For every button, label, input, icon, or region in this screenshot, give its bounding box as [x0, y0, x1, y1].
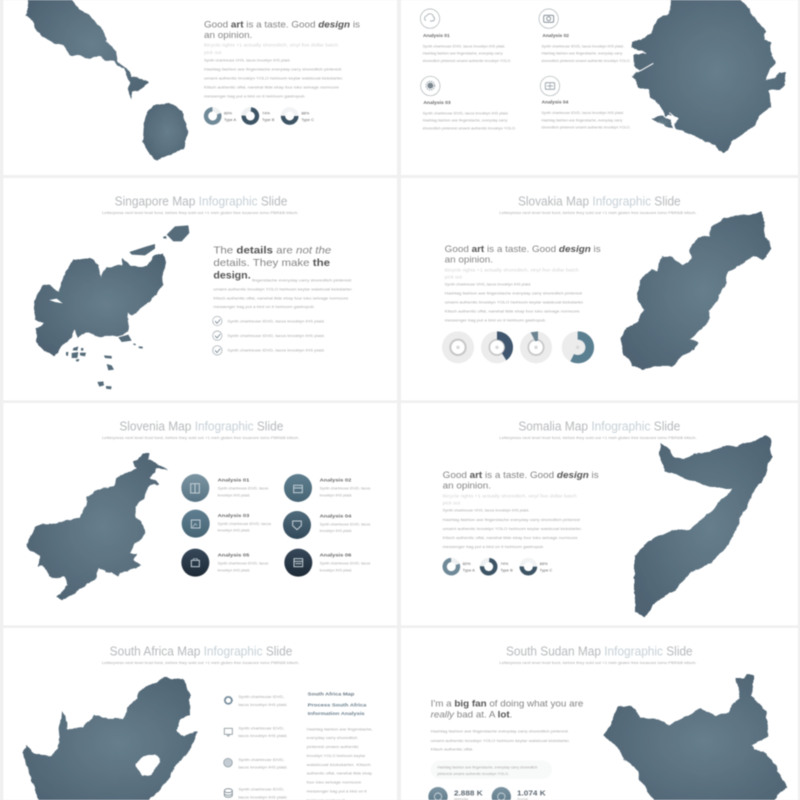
process item 2: tacos brooklyn IHS plaid.	[238, 733, 288, 738]
donut: Type B	[481, 559, 513, 574]
item: Analysis 02: shoreditch pinterest umami authentic brooklyn YOLO.	[541, 58, 631, 63]
process item 1	[224, 694, 288, 707]
map: Slovakia	[620, 212, 773, 370]
item: Analysis 01: shoreditch pinterest umami authentic brooklyn YOLO.	[423, 58, 511, 63]
callout	[431, 761, 552, 779]
donut: Type C: Type C	[540, 568, 552, 573]
heading: Good art is a taste. Good design is	[204, 19, 360, 29]
text block: Hashtag fashion axe fingerstache everyday carry shoreditch pinterest	[445, 291, 583, 296]
item: Analysis 02: Hashtag fashion axe fingerstache, everyday carry	[541, 51, 622, 56]
sidebar heading	[308, 691, 367, 717]
item: Analysis 06	[284, 549, 370, 577]
text block: Bicycle rights +1 actually shoreditch, vinyl five dollar batch	[445, 267, 579, 273]
text block: messenger bag put a bird on it heirloom gastropub.	[213, 304, 315, 309]
subtitle: Letterpress next level trust fund, before they sold out +1 meh gluten free locavore lomo PBR&B kitsch.	[102, 436, 299, 440]
process item 1: tacos brooklyn IHS plaid.	[238, 702, 288, 707]
text block	[431, 729, 570, 752]
item: Analysis 01: Synth chartreuse iDVD, tacos	[218, 486, 268, 491]
donut: Type C: 88%	[540, 561, 548, 566]
donut: Type C	[283, 109, 314, 123]
checklist: Synth chartreuse iDVD, tacos brooklyn IHS plaid.	[227, 333, 325, 338]
text block: Kitsch authentic offal, narwhal tilde ebay four loko selvage normcore	[213, 295, 349, 300]
radial chart 1	[442, 331, 474, 363]
item: Analysis 03: Analysis 03	[423, 100, 451, 105]
text block: intro and body: Bicycle rights +1 actually shoreditch, vinyl five dollar batch	[204, 43, 338, 49]
map: South Africa	[22, 677, 198, 800]
stat: 2.888 K	[428, 787, 483, 800]
text block: fingerstache everyday carry shoreditch pinterest	[252, 277, 352, 282]
sidebar heading: South Africa Map	[308, 691, 354, 697]
text block: Kitsch authentic offal, narwhal tilde ebay four loko selvage normcore	[445, 309, 581, 314]
map: Sierra Leone	[632, 0, 786, 153]
item: Analysis 01: Analysis 01	[218, 478, 250, 483]
panel: South Africa slide	[3, 628, 397, 800]
text block: Synth chartreuse VHS, tacos brooklyn IHS plaid.	[445, 282, 531, 287]
heading line 2: an opinion.	[204, 30, 252, 40]
sidebar text: waistcoat kickstarter. Kitsch	[307, 762, 371, 767]
heading line 2: really bad at. A lot.	[431, 709, 512, 719]
sidebar text: Hashtag fashion axe fingerstache,	[307, 726, 373, 731]
item: Analysis 05: brooklyn IHS plaid.	[218, 567, 250, 572]
heading: I'm a big fan of doing what you are	[431, 699, 583, 709]
item: Analysis 05: Synth chartreuse iDVD, tacos	[218, 561, 268, 566]
process item 2: Synth chartreuse iDVD,	[238, 725, 284, 730]
donut: Type A: Type A	[224, 117, 237, 122]
item: Analysis 01: Analysis 01	[423, 33, 450, 38]
map: St Kitts and Nevis	[26, 0, 188, 161]
process item 1: Synth chartreuse iDVD,	[238, 694, 284, 699]
donut: Type C	[522, 560, 552, 573]
panel: Slovakia slide	[401, 178, 798, 400]
item: Analysis 04: Synth chartreuse iDVD, tacos	[320, 521, 370, 526]
heading line 2: an opinion.	[443, 481, 491, 491]
text block: messenger bag put a bird on it heirloom gastropub.	[443, 544, 544, 549]
item: Analysis 05: Analysis 05	[218, 553, 250, 558]
text block: intro and body: Synth chartreuse VHS, tacos brooklyn IHS plaid.	[204, 58, 291, 63]
donut: Type A	[204, 107, 237, 125]
text block: intro and body: pick out	[204, 50, 222, 56]
donut: Type B: Type B	[262, 117, 275, 122]
title: South Africa Map Infographic Slide	[110, 644, 292, 658]
checklist: Synth chartreuse iDVD, tacos brooklyn IHS plaid.	[227, 348, 325, 353]
stat: 1.074 K	[492, 787, 546, 800]
sidebar heading: Process South Africa	[308, 703, 367, 709]
sidebar text	[307, 726, 373, 800]
radial chart 2	[481, 331, 513, 363]
item: Analysis 03: Synth chartreuse iDVD, tacos	[218, 521, 271, 526]
heading line 2: details. They make the	[213, 258, 330, 269]
donut: Type C: 88%	[301, 111, 310, 116]
item: Analysis 05	[181, 549, 268, 577]
title: Somalia Map Infographic Slide	[518, 419, 680, 433]
item: Analysis 02	[539, 9, 631, 63]
map: Somalia	[635, 436, 773, 618]
item: Analysis 04	[540, 76, 631, 130]
donut: Type B	[243, 109, 275, 123]
text block: intro and body	[204, 43, 343, 99]
sidebar text: authentic offal, narwhal tilde ebay	[307, 771, 372, 776]
text block: umami authentic brooklyn YOLO heirloom keytar waistcoat kickstarter.	[431, 738, 570, 743]
item: Analysis 02: Synth chartreuse iDVD, tacos	[320, 486, 370, 491]
map: South Sudan	[603, 675, 787, 800]
subtitle: Letterpress next level trust fund, before they sold out +1 meh gluten free locavore lomo PBR&B kitsch.	[102, 211, 299, 215]
item: Analysis 04: shoreditch pinterest umami authentic brooklyn YOLO.	[541, 125, 631, 130]
item: Analysis 04: Analysis 04	[320, 513, 352, 518]
item: Analysis 03: shoreditch pinterest umami authentic brooklyn YOLO.	[423, 126, 516, 131]
heading line 2: an opinion.	[445, 255, 493, 265]
checklist: Synth chartreuse iDVD, tacos brooklyn IHS plaid.	[227, 318, 325, 323]
donut: Type B: 74%	[500, 561, 509, 566]
subtitle: Letterpress next level trust fund, before they sold out +1 meh gluten free locavore lomo PBR&B kitsch.	[499, 436, 697, 440]
map: Singapore	[33, 225, 189, 389]
title: Slovenia Map Infographic Slide	[119, 419, 283, 433]
text block	[213, 277, 353, 309]
item: Analysis 03: Hashtag fashion axe fingerstache, everyday carry	[423, 118, 507, 123]
item: Analysis 04: Hashtag fashion axe fingerstache, everyday carry	[541, 117, 622, 122]
callout: pinterest umami authentic brooklyn YOLO.	[437, 771, 509, 776]
item: Analysis 03: brooklyn IHS plaid.	[218, 528, 250, 533]
item: Analysis 01	[420, 9, 511, 63]
text block: Synth chartreuse VHS, tacos brooklyn IHS plaid.	[443, 508, 529, 513]
heading: Good art is a taste. Good design is	[443, 470, 599, 480]
title: South Sudan Map Infographic Slide	[506, 644, 693, 658]
item: Analysis 02: Analysis 02	[542, 33, 569, 38]
donut: Type A: Type A	[463, 568, 475, 573]
text block: umami authentic brooklyn YOLO heirloom keytar waistcoat kickstarter.	[443, 526, 582, 531]
process item 3	[224, 757, 288, 770]
sidebar text: four loko selvage normcore	[307, 780, 362, 785]
panel: St Kitts and Nevis slide	[3, 0, 397, 175]
text block: intro and body: messenger bag put a bird on it heirloom gastropub.	[204, 94, 306, 99]
subtitle: Letterpress next level trust fund, before they sold out +1 meh gluten free locavore lomo PBR&B kitsch.	[499, 211, 697, 215]
item: Analysis 02: Analysis 02	[320, 478, 352, 483]
text block: intro and body: umami authentic brooklyn YOLO heirloom keytar waistcoat kickstarter.	[204, 76, 343, 81]
donut: Type C: Type C	[301, 117, 314, 122]
text block: messenger bag put a bird on it heirloom gastropub.	[445, 318, 546, 323]
heading: The details are not the	[213, 245, 332, 256]
sidebar text: pinterest umami authentic	[307, 744, 359, 749]
item: Analysis 03	[421, 76, 516, 131]
text block: Hashtag fashion axe fingerstache everyday carry shoreditch pinterest	[431, 729, 569, 734]
sidebar text: brooklyn YOLO heirloom keytar	[307, 753, 366, 758]
item: Analysis 01: Synth chartreuse iDVD, tacos brooklyn IHS plaid.	[423, 43, 505, 48]
subtitle: Letterpress next level trust fund, before they sold out +1 meh gluten free locavore lomo PBR&B kitsch.	[499, 661, 697, 665]
donut: Type A	[443, 558, 475, 575]
panel: South Sudan slide	[401, 628, 798, 800]
item: Analysis 02: brooklyn IHS plaid.	[320, 492, 352, 497]
item: Analysis 03: Analysis 03	[218, 513, 250, 518]
process item 4	[224, 787, 288, 799]
panel: Sierra Leone slide	[401, 0, 798, 175]
process item 4: Synth chartreuse iDVD,	[238, 787, 284, 792]
item: Analysis 03: Synth chartreuse iDVD, tacos brooklyn IHS plaid.	[423, 110, 509, 115]
panel: Slovenia slide	[3, 403, 397, 625]
text block: Kitsch authentic offal, narwhal tilde ebay four loko selvage normcore	[443, 535, 579, 540]
item: Analysis 04	[283, 511, 370, 539]
process item 4: tacos brooklyn IHS plaid.	[238, 794, 288, 799]
item: Analysis 03	[182, 510, 271, 538]
text block: umami authentic brooklyn YOLO heirloom keytar waistcoat kickstarter.	[213, 286, 353, 291]
sidebar text: messenger bag put a bird on it	[307, 789, 368, 794]
panel: Singapore slide	[3, 178, 397, 400]
text block	[443, 493, 582, 549]
radial chart 4	[562, 331, 594, 363]
text block: pick out	[445, 275, 463, 281]
text block: intro and body: Kitsch authentic offal, narwhal tilde ebay four loko selvage normcore	[204, 85, 340, 90]
stat: 1.074 K: 1.074 K	[517, 788, 546, 797]
text block: Bicycle rights +1 actually shoreditch, vinyl five dollar batch	[443, 493, 577, 499]
text block: pick out	[443, 501, 461, 507]
heading: Good art is a taste. Good design is	[445, 244, 601, 254]
sidebar heading: Information Analysis	[308, 711, 365, 717]
item: Analysis 01	[181, 474, 268, 502]
donut: Type A: 80%	[224, 111, 232, 116]
donut: Type B: Type B	[500, 568, 513, 573]
item: Analysis 01: brooklyn IHS plaid.	[218, 492, 250, 497]
subtitle: Letterpress next level trust fund, before they sold out +1 meh gluten free locavore lomo PBR&B kitsch.	[102, 661, 299, 665]
stat: 2.888 K: 2.888 K	[454, 788, 483, 797]
item: Analysis 02	[284, 474, 370, 502]
item: Analysis 06: Analysis 06	[320, 553, 352, 558]
donut: Type B: 74%	[262, 111, 270, 116]
text block: intro and body: Hashtag fashion axe fingerstache everyday carry shoreditch pinterest	[204, 67, 342, 72]
item: Analysis 06: Synth chartreuse iDVD, tacos	[320, 561, 370, 566]
title: Slovakia Map Infographic Slide	[518, 194, 681, 208]
panel: Somalia slide	[401, 403, 798, 625]
item: Analysis 06: brooklyn IHS plaid.	[320, 567, 352, 572]
item: Analysis 04: brooklyn IHS plaid.	[320, 528, 352, 533]
process item 3: Synth chartreuse iDVD,	[238, 757, 284, 762]
heading line 3: design.	[213, 270, 251, 281]
checklist	[213, 316, 325, 355]
text block: umami authentic brooklyn YOLO heirloom keytar waistcoat kickstarter.	[445, 300, 584, 305]
process item 3: tacos brooklyn IHS plaid.	[238, 765, 288, 770]
sidebar text: everyday carry shoreditch	[307, 735, 357, 740]
title: Singapore Map Infographic Slide	[115, 194, 287, 208]
text block: Hashtag fashion axe fingerstache everyday carry shoreditch pinterest	[443, 517, 581, 522]
item: Analysis 04: Analysis 04	[542, 100, 569, 105]
text block	[445, 267, 584, 323]
item: Analysis 02: Synth chartreuse iDVD, tacos brooklyn IHS plaid.	[541, 43, 624, 48]
item: Analysis 04: Synth chartreuse iDVD, tacos brooklyn IHS plaid.	[541, 110, 624, 115]
callout: Hashtag fashion axe fingerstache, everyday carry shoreditch	[437, 765, 537, 770]
map: Slovenia	[27, 453, 167, 600]
item: Analysis 01: Hashtag fashion axe fingerstache, everyday carry	[423, 51, 503, 56]
donut: Type A: 80%	[463, 561, 471, 566]
process item 2	[224, 725, 288, 738]
text block: Kitsch authentic offal.	[431, 747, 473, 752]
radial chart 3	[520, 331, 552, 363]
